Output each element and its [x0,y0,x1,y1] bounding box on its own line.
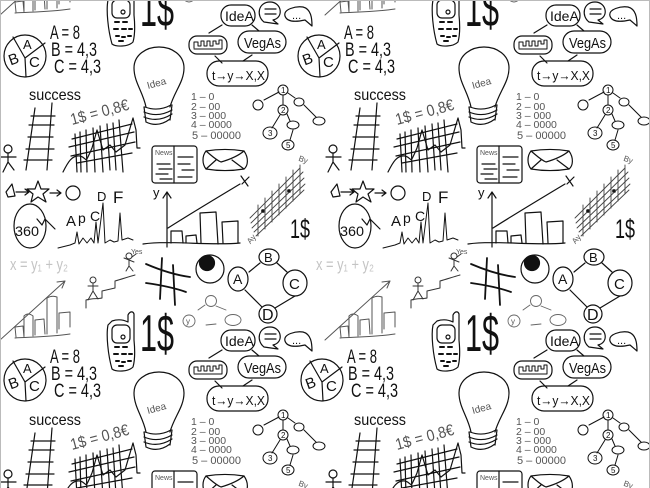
network A B C D: A [233,271,243,287]
tile copy: top left row [0,0,325,46]
diagonal grid chart [245,154,309,246]
dollar euro rate: 1$ = 0,8€ [69,97,131,129]
spiked letters chart [58,188,133,248]
tile: doodle pattern [0,2,325,371]
speech bubble: dots [285,7,312,26]
news page [152,146,197,183]
spiked letters chart: C [90,208,100,224]
numbered list: 4 – 0000 [191,119,232,131]
bubble: Vegas: VegAs [244,35,281,52]
speech bubble: dots: ... [292,10,301,22]
faint formula right: x = y₁ + y₂ [316,255,374,274]
bubble: formula [207,61,268,86]
bar and line graph: y [153,185,160,200]
faint formula left: x = y₁ + y₂ [10,255,68,274]
numbered list: 1 – 0 [191,91,215,103]
spiked letters chart: p [78,210,86,226]
360 circle: 360 [15,223,39,239]
large dollar label: 1$ [140,305,174,363]
pie and equations: top right [298,23,395,78]
diagonal grid chart: By [297,154,309,166]
bar and line graph [143,176,249,247]
pie and equations: top left [4,23,101,78]
small grey tree: y [186,317,190,326]
hatched price chart [63,118,140,172]
tree diagram: 5 [286,141,291,150]
news page: News [155,150,173,157]
small grey tree [183,296,241,327]
staircase with figures: Yes [131,249,143,256]
numbered list: 3 – 000 [191,110,226,122]
light bulb: Idea [146,76,168,92]
numbered list [191,91,241,142]
success label: success [29,87,81,104]
network A B C D: B [264,250,273,265]
speech bubble: equals [259,2,280,24]
network A B C D: D [262,307,274,324]
pie and equations: bottom left [4,347,101,402]
eye [196,255,224,283]
bubble: Vegas [238,31,286,53]
bubble: Idea: IdeA [225,8,254,24]
diagonal grid chart: Ay [245,233,258,246]
tile copy: middle right [325,2,650,371]
connectors between idea bubbles [209,25,259,63]
spiked letters chart: F [113,188,123,207]
hash grid [146,258,190,305]
flow: shape star circle [6,181,80,202]
spiked letters chart: D [97,189,106,204]
small dollar label: 1$ [290,214,310,244]
tile copy: bottom right [325,327,650,488]
bubble: formula: t→y→X,X [212,68,265,83]
ladder [24,103,55,170]
tile copy: bottom left [0,327,325,488]
tree diagram: 2 [281,106,286,115]
staircase with figures [86,249,143,308]
tree diagram: 1 [281,86,286,95]
rising bar chart with arrow [0,281,70,340]
numbered list: 2 – 00 [191,101,220,113]
envelope [203,150,247,170]
mobile phone [107,312,135,371]
numbered list: 5 – 00000 [192,130,241,142]
tree diagram [253,85,325,150]
bubble: Idea [221,5,255,26]
tree diagram: 3 [268,129,273,138]
tile copy: top right row [325,0,650,46]
stick figure [1,145,16,172]
spiked letters chart: A [66,213,76,230]
bubble: squiggle [189,36,227,54]
pie and equations: bottom right [301,347,398,402]
network A B C D: C [289,276,300,293]
light bulb [134,47,184,124]
network A B C D [228,249,307,324]
360 circle [14,204,55,248]
